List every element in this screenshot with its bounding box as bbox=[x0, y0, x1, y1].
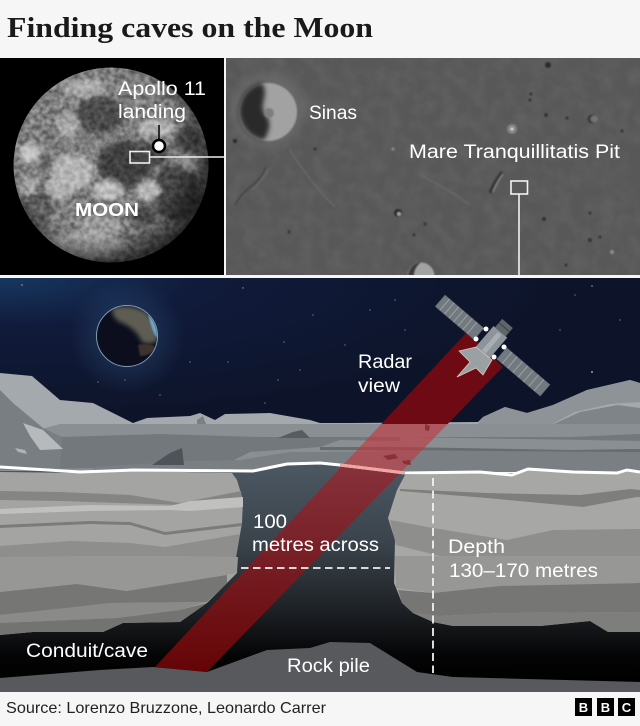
radar beam bbox=[155, 332, 503, 672]
solar panels and body bbox=[432, 281, 562, 400]
moon globe bbox=[13, 67, 209, 264]
surface ridges bbox=[235, 167, 266, 205]
pit marker bbox=[511, 181, 528, 275]
cave width dashed line bbox=[241, 567, 390, 569]
Sinas label: Sinas bbox=[309, 103, 357, 124]
night sky bbox=[0, 278, 640, 438]
rock floor and rock pile bbox=[0, 642, 640, 692]
title: Finding caves on the Moon bbox=[7, 12, 373, 44]
rock pile label: Rock pile bbox=[287, 656, 370, 677]
far mountains bbox=[0, 373, 640, 440]
right rock strata bbox=[388, 469, 640, 632]
BBC logo bbox=[575, 698, 635, 716]
beam tint on surface line bbox=[340, 465, 405, 473]
BBC logo: C bbox=[622, 700, 632, 715]
stars bbox=[21, 284, 621, 406]
dark slope at left bbox=[0, 390, 62, 470]
moon label: MOON bbox=[75, 200, 139, 220]
BBC logo: B bbox=[601, 700, 610, 715]
depth label: 130–170 metres bbox=[449, 561, 598, 582]
location box and connector bbox=[130, 152, 225, 163]
left rock strata bbox=[0, 471, 243, 635]
Mare Tranquillitatis Pit label: Mare Tranquillitatis Pit bbox=[409, 142, 621, 163]
dish tail bbox=[457, 347, 492, 377]
earth bbox=[80, 291, 174, 384]
small craters bbox=[233, 62, 624, 266]
satellite bbox=[432, 281, 562, 400]
footer source: Source: Lorenzo Bruzzone, Leonardo Carrer bbox=[6, 700, 327, 717]
depth label: Depth bbox=[448, 537, 505, 558]
Apollo 11 marker bbox=[153, 125, 165, 152]
foreground rocks bbox=[15, 416, 310, 465]
cave width label: 100 bbox=[253, 512, 287, 533]
Radar view label: view bbox=[358, 376, 400, 397]
panel: lunar cross-section bbox=[0, 278, 640, 692]
Apollo 11 landing label: landing bbox=[118, 102, 186, 123]
Apollo 11 landing label: Apollo 11 bbox=[118, 79, 206, 100]
cave width label: metres across bbox=[252, 535, 379, 556]
lunar ground bbox=[0, 424, 640, 472]
depth dashed line bbox=[432, 478, 434, 673]
ground marks inside beam bbox=[383, 424, 430, 465]
Radar view label: Radar bbox=[358, 352, 413, 373]
conduit label: Conduit/cave bbox=[26, 641, 148, 662]
panel: Mare Tranquillitatis surface bbox=[226, 58, 640, 290]
crater: Sinas bbox=[232, 74, 304, 146]
lunar surface line bbox=[0, 463, 640, 475]
panel: moon bbox=[0, 58, 225, 275]
cave cross-section bbox=[0, 463, 640, 692]
joints bbox=[474, 326, 506, 360]
BBC logo: B bbox=[579, 700, 588, 715]
crater at lower edge bbox=[407, 262, 436, 275]
